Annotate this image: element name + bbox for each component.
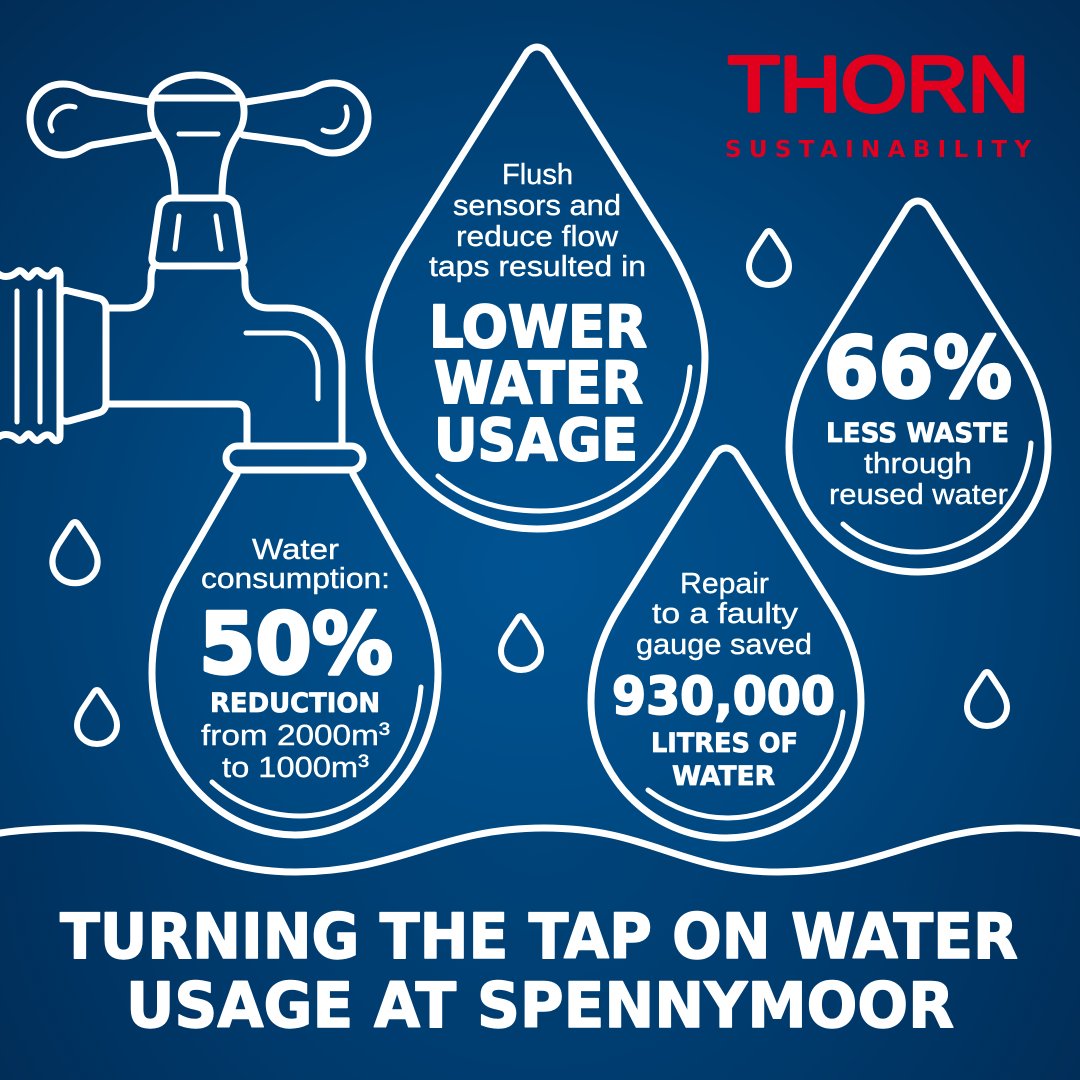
- logo: Thorn Sustainability: [725, 40, 1031, 163]
- drop highlight: [648, 712, 843, 818]
- heading: lower water usage: USAGE: [434, 406, 638, 474]
- heading: lower water usage: [429, 293, 647, 474]
- drop outline: [789, 201, 1048, 572]
- tap nut: [226, 446, 363, 470]
- icon: small drop top right: [749, 231, 789, 285]
- wave line: [0, 828, 1080, 872]
- text: from 2000 to 1000: ³: [358, 750, 369, 782]
- icon: small drop left: [52, 522, 98, 583]
- title: [60, 900, 1018, 1042]
- text: through reused water: through: [864, 448, 972, 480]
- text: from 2000 to 1000: from 2000m: [201, 720, 356, 752]
- text: intro: Water: [252, 534, 339, 566]
- text: repair: to a faulty: [652, 598, 799, 630]
- text: repair: Repair: [680, 568, 769, 600]
- title: USAGE AT SPENNYMOOR: [126, 969, 954, 1042]
- drop highlight: [843, 443, 1031, 552]
- stat: 930,000: 930,000: [612, 667, 835, 727]
- text: less waste: LESS WASTE: [826, 418, 1009, 449]
- water surface panel: [0, 828, 1080, 1080]
- tap collar: [152, 198, 244, 266]
- tap body and spout: [108, 268, 342, 446]
- tap threaded pipe: [0, 270, 60, 441]
- drop outline: [152, 474, 438, 835]
- text: flush sensors: taps resulted in: [429, 251, 646, 283]
- text: flush sensors: reduce flow: [456, 221, 619, 253]
- text: from 2000 to 1000: ³: [379, 718, 390, 750]
- panel: less waste drop: [789, 201, 1048, 572]
- icon: small drop lower left: [77, 690, 117, 744]
- drop highlight: [212, 687, 421, 816]
- text: litres of water: LITRES OF: [651, 728, 798, 759]
- text: repair: [636, 568, 812, 661]
- logo: Thorn Sustainability: SUSTAINABILITY: [725, 137, 1031, 163]
- panel: lower water usage drop: [369, 47, 705, 529]
- panel: water consumption drop: consumption:: [201, 563, 390, 595]
- tap handle: [30, 75, 368, 198]
- text: through reused water: [829, 448, 1008, 511]
- panel: water consumption drop: [152, 474, 438, 835]
- text: flush sensors: sensors and: [453, 190, 621, 222]
- title: TURNING THE TAP ON WATER: [60, 900, 1018, 973]
- text: reduction: REDUCTION: [210, 688, 380, 719]
- icon: tap: [0, 75, 368, 470]
- drop highlight: [438, 367, 690, 511]
- text: flush sensors: Flush: [502, 159, 573, 191]
- text: litres of water: [651, 728, 798, 792]
- drop outline: [369, 47, 705, 529]
- text: through reused water: reused water: [829, 479, 1008, 511]
- icon: small drop right: [967, 672, 1007, 726]
- icon: small drop centre: [501, 616, 541, 670]
- heading: lower water usage: LOWER: [429, 293, 647, 361]
- tap flange: [60, 290, 106, 421]
- text: flush sensors: [429, 159, 646, 283]
- text: from 2000 to 1000: to 1000m: [222, 752, 343, 784]
- text: from 2000 to 1000: [201, 718, 390, 784]
- heading: lower water usage: WATER: [434, 349, 643, 417]
- text: litres of water: WATER: [672, 761, 775, 792]
- drop outline: [591, 448, 861, 838]
- logo: Thorn Sustainability: THORN: [728, 40, 1029, 128]
- text: repair: gauge saved: [636, 629, 812, 661]
- stat: 66%: 66%: [824, 319, 1012, 417]
- stat: 50%: 50%: [199, 595, 393, 693]
- panel: faulty gauge drop: [591, 448, 861, 838]
